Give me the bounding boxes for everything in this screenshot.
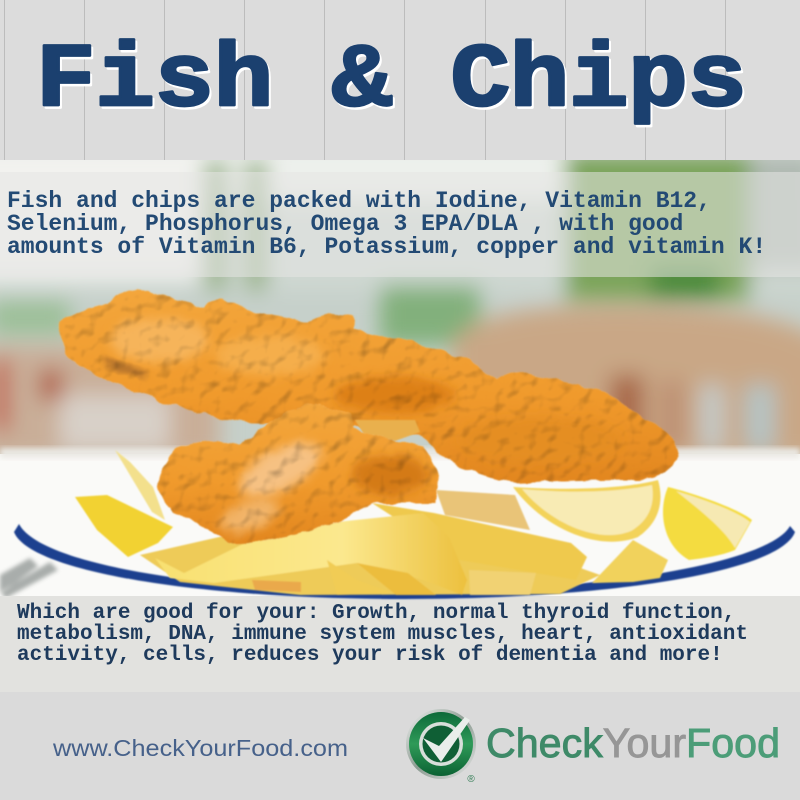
photo: chips and lemon — [75, 450, 752, 595]
photo: lower fish — [158, 405, 439, 545]
photo background — [0, 140, 800, 700]
photo: plate — [14, 524, 795, 599]
icon: logo check badge — [406, 709, 476, 785]
title: Fish & Chips — [38, 33, 749, 135]
panel: header boards — [0, 0, 800, 160]
photo: small chip behind fish — [355, 420, 420, 441]
text: benefits: Which are good for your: Growth, normal thyroid function, — [17, 602, 735, 625]
icon: lemon wedge large — [513, 480, 661, 542]
text: benefits: metabolism, DNA, immune system muscles, heart, antioxidant — [17, 623, 748, 646]
text: website: www.CheckYourFood.com — [52, 735, 348, 761]
text: nutrients: Fish and chips are packed with Iodine, Vitamin B12, — [7, 188, 711, 214]
icon: lemon wedge small — [663, 487, 752, 560]
text: logo wordmark: CheckYourFood — [486, 720, 780, 766]
title: Fish & Chips — [36, 31, 747, 132]
text: nutrients: amounts of Vitamin B6, Potassium, copper and vitamin K! — [7, 234, 766, 260]
panel: footer — [0, 692, 800, 800]
panel: benefits text — [17, 602, 761, 667]
panel: nutrients overlay — [0, 172, 800, 277]
text: benefits: activity, cells, reduces your risk of dementia and more! — [17, 644, 723, 667]
icon: logo check badge: ® — [467, 774, 475, 785]
photo: upper fish — [58, 288, 678, 483]
text: nutrients: Selenium, Phosphorus, Omega 3 EPA/DLA , with good — [7, 211, 683, 237]
